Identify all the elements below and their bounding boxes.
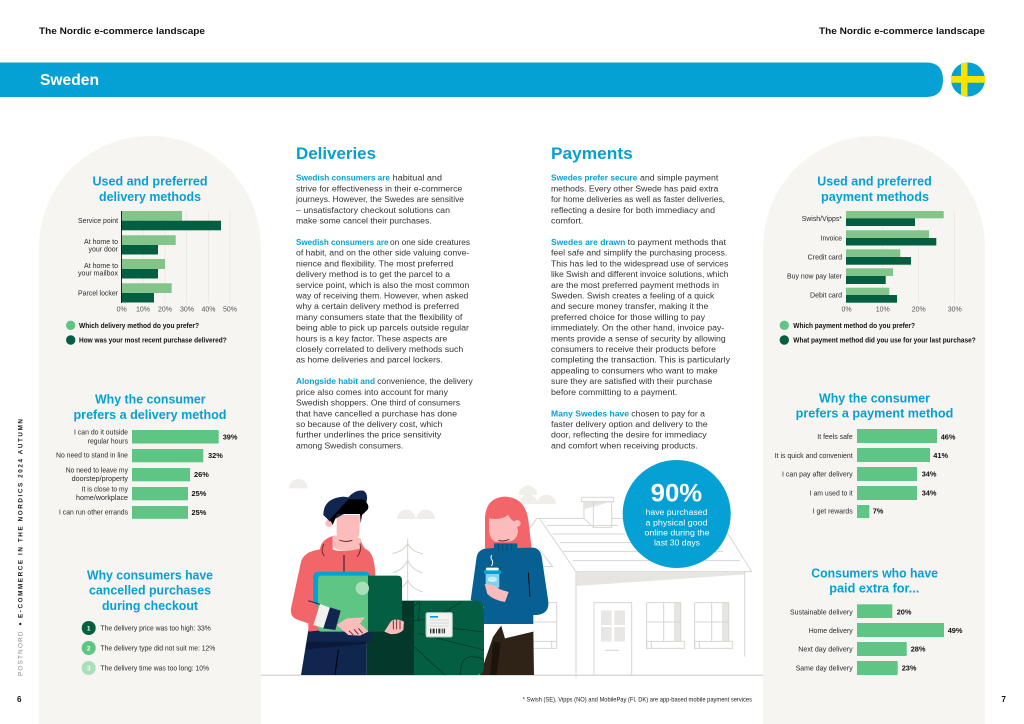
heading	[817, 174, 932, 204]
paragraph 2: like Swish and different invoice solutions, which	[551, 270, 728, 279]
values: 25%	[192, 508, 207, 517]
paragraph 2: many consumers state that the flexibility of	[296, 313, 463, 322]
category labels: your mailbox	[78, 270, 118, 278]
heading	[92, 174, 208, 204]
chart: consumers who have paid extra for	[790, 567, 963, 675]
paragraph 2: nience and flexibility. The most preferred	[296, 259, 453, 268]
paragraph 2: Swedes are drawn	[551, 238, 625, 247]
paragraph 3: door, reflecting the desire for immediacy	[551, 431, 707, 440]
axis labels: 10%	[876, 306, 890, 314]
category labels	[775, 434, 853, 516]
paragraph 1: methods. Every other Swede has paid extra	[551, 184, 719, 193]
paragraph 2: immediately. On the other hand, invoice pay-	[551, 324, 725, 333]
category labels: It is close to my	[82, 486, 128, 493]
values	[192, 432, 238, 517]
paragraph 3: and comfort when receiving products.	[551, 441, 698, 450]
paragraph 2: as home deliveries and parcel lockers.	[296, 356, 443, 365]
category labels: Swish/Vipps*	[802, 216, 842, 223]
legend	[780, 321, 976, 345]
heading	[74, 392, 226, 422]
axis labels: 0%	[841, 306, 852, 314]
category labels: home/workplace	[76, 495, 128, 502]
reason 1	[82, 621, 211, 635]
paragraph 2: and secure money transfer, making it the	[551, 302, 709, 311]
category labels: Next day delivery	[798, 647, 853, 654]
paragraph 2: way of receiving them. However, when asked	[295, 292, 468, 300]
shirt	[484, 623, 533, 638]
chart: used and preferred delivery methods	[66, 174, 237, 345]
values: 39%	[223, 432, 238, 442]
paragraph 1: reflecting a desire for both immediacy and	[551, 206, 715, 215]
heading: Why the consumer	[819, 391, 930, 405]
hand	[485, 584, 509, 602]
category labels: your door	[88, 246, 119, 254]
bars	[857, 604, 944, 675]
callout: 90 percent: have purchased	[646, 508, 708, 517]
running header right: The Nordic e-commerce landscape	[819, 26, 985, 37]
category labels: doorstep/property	[72, 476, 129, 483]
paragraph 2: consumers to receive their products before	[551, 345, 717, 354]
section banner: Sweden	[0, 62, 943, 97]
paragraph 1: and simple payment	[640, 174, 719, 183]
legend: Which delivery method do you prefer?	[79, 323, 199, 330]
axis labels: 0%	[117, 306, 127, 314]
values: 28%	[911, 645, 926, 654]
paragraph 2	[295, 238, 470, 365]
category labels: Credit card	[808, 254, 842, 261]
paragraph 3: further underlines the price sensitivity	[296, 431, 441, 440]
legend: Which payment method do you prefer?	[793, 323, 915, 330]
callout: 90 percent: online during the	[644, 528, 710, 537]
paragraph 2: preferred choice for those willing to pay	[551, 313, 705, 322]
paragraph 2: why a certain delivery method is preferred	[295, 302, 459, 311]
paragraph 3: chosen to pay for a	[631, 409, 706, 418]
paragraph 1	[551, 174, 725, 226]
category labels: I am used to it	[810, 490, 853, 497]
category labels: Service point	[78, 218, 118, 225]
illustration: tree and clouds	[289, 479, 435, 602]
axis labels: 40%	[201, 306, 216, 314]
callout: 90 percent: a physical good	[646, 518, 708, 527]
trousers	[301, 630, 372, 675]
paragraph 2: Sweden. Swish creates a feeling of a quick	[551, 292, 715, 300]
callout: 90 percent	[623, 460, 731, 568]
paragraph 2: This has led to the widespread use of services	[551, 259, 728, 268]
paragraph 3: Swedish shoppers. One third of consumers	[296, 399, 460, 408]
paragraph 1: Swedes prefer secure	[551, 174, 638, 183]
category labels: It feels safe	[817, 434, 853, 441]
paragraph 2: before committing to a payment.	[551, 388, 677, 397]
heading: paid extra for...	[829, 582, 919, 596]
page number 6: 6	[17, 695, 22, 704]
hair	[330, 499, 368, 525]
text block: Payments	[551, 144, 730, 450]
cap	[323, 490, 367, 522]
heading: Used and preferred	[92, 174, 208, 188]
list: why consumers have cancelled purchases	[82, 568, 215, 675]
category labels: It is quick and convenient	[775, 453, 853, 460]
heading: cancelled purchases	[89, 584, 211, 598]
hoodie	[291, 536, 375, 632]
category labels: Same day delivery	[796, 666, 853, 673]
legend: What payment method did you use for your last purchase?	[793, 338, 976, 345]
callout: 90 percent: last 30 days	[654, 539, 700, 548]
paragraph 1: journeys. However, the Swedes are sensitive	[295, 195, 465, 204]
reason 2: 2	[87, 645, 91, 652]
axis labels: 10%	[136, 306, 150, 314]
category labels	[56, 430, 129, 516]
paragraph 2: delivery method is to get the parcel to a	[296, 270, 451, 279]
vertical publication label: E-COMMERCE IN THE NORDICS 2024 AUTUMN	[18, 419, 24, 618]
axis labels: 30%	[948, 306, 962, 314]
reason 1: 1	[87, 625, 91, 632]
boxes held	[313, 572, 370, 605]
axis labels: 30%	[180, 306, 194, 314]
heading	[811, 567, 938, 596]
reason 3: 3	[87, 665, 91, 672]
legend	[66, 321, 227, 345]
paragraph 2: hours is a key factor. These aspects are	[296, 334, 448, 343]
trousers	[480, 625, 534, 675]
category labels: At home to	[84, 239, 118, 246]
paragraph 2: being able to pick up parcels outside regular	[296, 324, 469, 333]
paragraph 2: on one side creatures	[390, 238, 470, 247]
paragraph 3: so because of the delivery cost, which	[296, 420, 442, 429]
paragraph 3	[551, 409, 708, 450]
reason 2	[82, 641, 215, 655]
category labels: regular hours	[88, 438, 128, 445]
category labels: Buy now pay later	[787, 273, 843, 280]
sleeve cuff and hands	[313, 604, 331, 628]
illustration: house	[517, 486, 752, 677]
bars	[121, 211, 221, 303]
category labels: I can run other errands	[59, 509, 128, 516]
heading: Deliveries	[296, 144, 376, 163]
paragraph 3: Alongside habit and	[296, 377, 375, 386]
heading: during checkout	[102, 599, 199, 613]
heading: delivery methods	[99, 190, 201, 204]
paragraph 1: make some cancel their purchases.	[296, 216, 432, 226]
reason 3	[82, 661, 209, 675]
bars	[846, 211, 944, 303]
heading: payment methods	[821, 190, 929, 204]
values: 26%	[194, 470, 209, 479]
heading: Used and preferred	[817, 174, 932, 188]
chart: used and preferred payment methods	[780, 174, 976, 345]
axis labels	[841, 306, 962, 314]
paragraph 2: completing the transaction. This is particularly	[551, 356, 730, 365]
axis labels: 50%	[223, 306, 237, 314]
chart: why the consumer prefers a payment method	[775, 391, 956, 518]
panel: left background arch	[39, 136, 261, 724]
paragraph 2: of habit, and on the other side valuing conve-	[296, 249, 470, 258]
section banner: Sweden: Sweden	[40, 72, 99, 89]
category labels: No need to stand in line	[56, 453, 128, 460]
heading: Why the consumer	[95, 392, 206, 406]
paragraph 2: appealing to consumers who want to make	[551, 366, 718, 375]
values: 25%	[192, 489, 207, 498]
category labels: At home to	[84, 263, 118, 270]
paragraph 3	[296, 377, 473, 450]
paragraph 3: price also comes into account for many	[296, 388, 448, 397]
paragraph 3: among Swedish consumers.	[296, 441, 403, 450]
paragraph 2: are the most preferred payment methods in	[551, 281, 719, 290]
neck and face	[333, 533, 361, 551]
running header left: The Nordic e-commerce landscape	[39, 26, 205, 37]
hair	[485, 497, 532, 548]
paragraph 2: sure they are satisfied with their purchase	[551, 377, 713, 386]
heading: Why consumers have	[87, 568, 213, 582]
paragraph 3: Many Swedes have	[551, 409, 630, 418]
values	[897, 607, 963, 673]
values: 41%	[933, 451, 949, 460]
coffee cup	[491, 555, 493, 566]
paragraph 2: feel safe and simplify the purchasing process.	[551, 249, 727, 258]
values	[873, 432, 956, 516]
category labels: No need to leave my	[66, 467, 128, 474]
heading: Payments	[551, 144, 633, 163]
paragraph 1: habitual and	[393, 174, 442, 183]
category labels: I can do it outside	[74, 430, 128, 437]
values: 23%	[902, 664, 917, 673]
paragraph 1: – unsatisfactory checkout solutions can	[296, 206, 450, 215]
paragraph 1	[295, 174, 465, 226]
paragraph 3: faster delivery option and delivery to the	[551, 420, 708, 429]
heading: prefers a delivery method	[74, 408, 226, 422]
paragraph 2: Swedish consumers are	[296, 238, 389, 247]
paragraph 2: to payment methods that	[628, 238, 727, 247]
paragraph 2: closely correlated to delivery methods such	[296, 345, 463, 354]
sweater	[471, 543, 548, 624]
paragraph 1: Swedish consumers are	[296, 174, 391, 183]
values: 34%	[922, 488, 937, 497]
category labels: Sustainable delivery	[790, 609, 853, 616]
category labels: I can pay after delivery	[782, 472, 853, 479]
category labels: Parcel locker	[78, 290, 119, 298]
paragraph 3: that have cancelled a purchase has done	[296, 409, 458, 418]
paragraph 1: strive for effectiveness in their e-commerce	[296, 184, 463, 193]
paragraph 2	[551, 238, 730, 397]
icon: Swedish flag	[951, 62, 985, 96]
values: 32%	[208, 451, 223, 460]
paragraph 1: comfort.	[551, 216, 583, 226]
values: 46%	[941, 432, 956, 441]
category labels: I get rewards	[813, 509, 853, 516]
paragraph 2: service point, which is also the most common	[296, 281, 469, 290]
vertical publication label: POSTNORD	[18, 631, 24, 676]
reason 3: The delivery time was too long: 10%	[100, 666, 209, 673]
values: 7%	[873, 507, 884, 516]
category labels	[790, 609, 853, 673]
paragraph 3: convenience, the delivery	[377, 377, 473, 386]
text block: Deliveries	[295, 144, 473, 450]
reason 1: The delivery price was too high: 33%	[100, 626, 211, 633]
category labels	[787, 216, 843, 299]
axis labels: 20%	[912, 306, 926, 314]
heading: Consumers who have	[811, 567, 938, 581]
face	[489, 515, 518, 542]
bars	[857, 429, 937, 518]
heading	[87, 568, 213, 613]
paragraph 2: ments provide a sense of security by allowing	[551, 334, 726, 343]
callout: 90 percent: 90%	[651, 480, 702, 508]
values: 20%	[897, 607, 912, 616]
category labels: Debit card	[810, 292, 842, 299]
paragraph 1: for home deliveries as well as faster deliveries,	[551, 195, 725, 204]
values: 34%	[922, 470, 937, 479]
axis labels	[117, 306, 237, 314]
footnote: * Swish (SE), Vipps (NO) and MobilePay (FI, DK) are app-based mobile payment services	[523, 698, 752, 704]
illustration: large parcel	[367, 601, 484, 675]
heading	[796, 391, 953, 421]
panel: right background arch	[763, 136, 985, 724]
category labels	[78, 218, 119, 298]
illustration: woman with coffee	[471, 497, 548, 675]
legend: How was your most recent purchase delivered?	[79, 338, 227, 345]
page number 7: 7	[1002, 695, 1006, 704]
axis labels: 20%	[158, 306, 172, 314]
reason 2: The delivery type did not suit me: 12%	[100, 646, 215, 653]
ground line	[261, 674, 763, 676]
values: 49%	[948, 626, 963, 635]
bars	[132, 430, 219, 519]
heading: prefers a payment method	[796, 407, 953, 421]
illustration: man holding parcel	[291, 490, 404, 675]
category labels: Home delivery	[809, 628, 853, 635]
category labels: Invoice	[821, 235, 842, 242]
chart: why the consumer prefers a delivery method	[56, 392, 238, 519]
